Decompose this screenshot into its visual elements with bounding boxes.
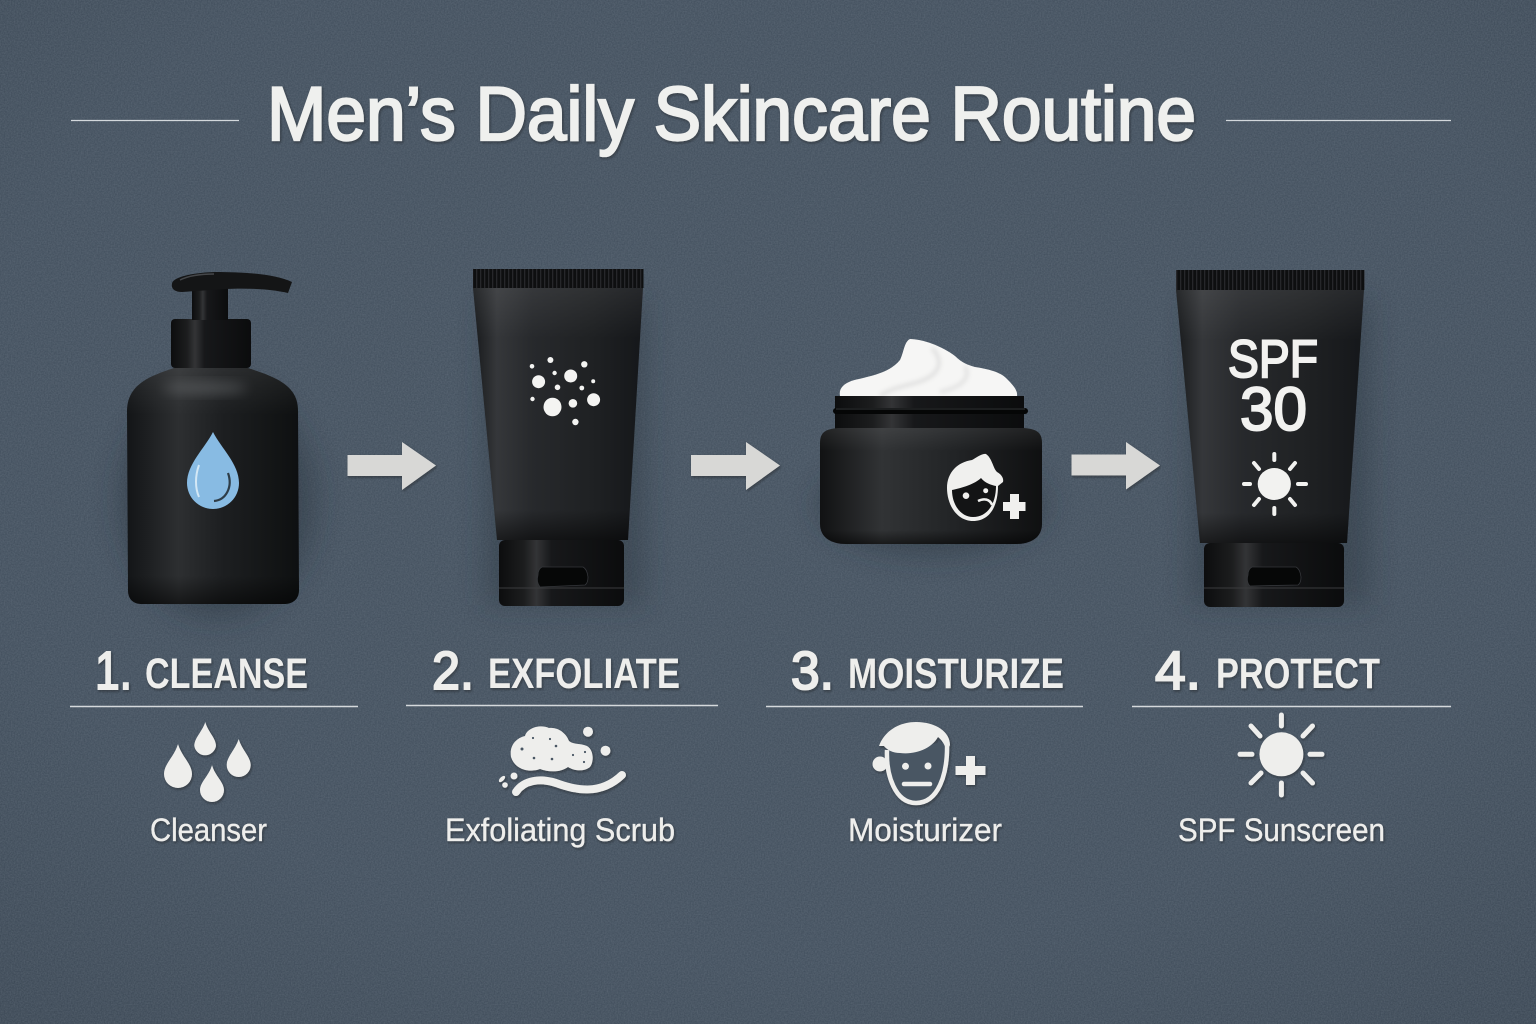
- icon: scrub particles: [530, 357, 600, 425]
- step 3 heading: 3.: [791, 641, 834, 701]
- step 3 heading: MOISTURIZE: [848, 650, 1064, 698]
- step 2 heading: EXFOLIATE: [488, 650, 680, 698]
- title: Men’s Daily Skincare Routine: [267, 72, 1196, 157]
- step 4 caption: SPF Sunscreen: [1178, 812, 1385, 848]
- step 2 heading: 2.: [432, 641, 474, 701]
- arrow 1: [348, 442, 436, 490]
- SPF 30 label: [1228, 330, 1318, 443]
- SPF 30 label: 30: [1240, 375, 1307, 443]
- step 1 heading: CLEANSE: [145, 650, 308, 698]
- arrow 2: [691, 442, 780, 490]
- step 1 heading: 1.: [95, 641, 132, 701]
- step 3 caption: Moisturizer: [848, 812, 1002, 848]
- product: exfoliating tube: [473, 269, 645, 606]
- cream: [840, 339, 1017, 396]
- step 4 heading: 4.: [1155, 641, 1201, 701]
- icon: water drop: [187, 432, 239, 509]
- product: pump bottle cleanser: [120, 272, 316, 618]
- icon: face with plus: [872, 722, 986, 803]
- step 3 heading: [791, 641, 1064, 701]
- product: SPF sunscreen tube: [1176, 270, 1370, 607]
- SPF 30 label: SPF: [1228, 330, 1318, 389]
- step 2 caption: Exfoliating Scrub: [445, 812, 675, 848]
- icon: exfoliating scrub: [498, 726, 622, 792]
- step 1 caption: Cleanser: [150, 812, 267, 848]
- step 2 heading: [432, 641, 680, 701]
- product: moisturizer jar: [817, 339, 1047, 555]
- arrow 3: [1072, 442, 1160, 490]
- icon: sun on tube: [1244, 454, 1306, 514]
- icon: sun: [1240, 715, 1322, 795]
- step 4 heading: PROTECT: [1216, 650, 1380, 698]
- step 4 heading: [1155, 641, 1380, 701]
- icon: cleanser drops: [164, 722, 251, 802]
- icon: face with plus on jar: [947, 454, 1026, 521]
- step 1 heading: [95, 641, 308, 701]
